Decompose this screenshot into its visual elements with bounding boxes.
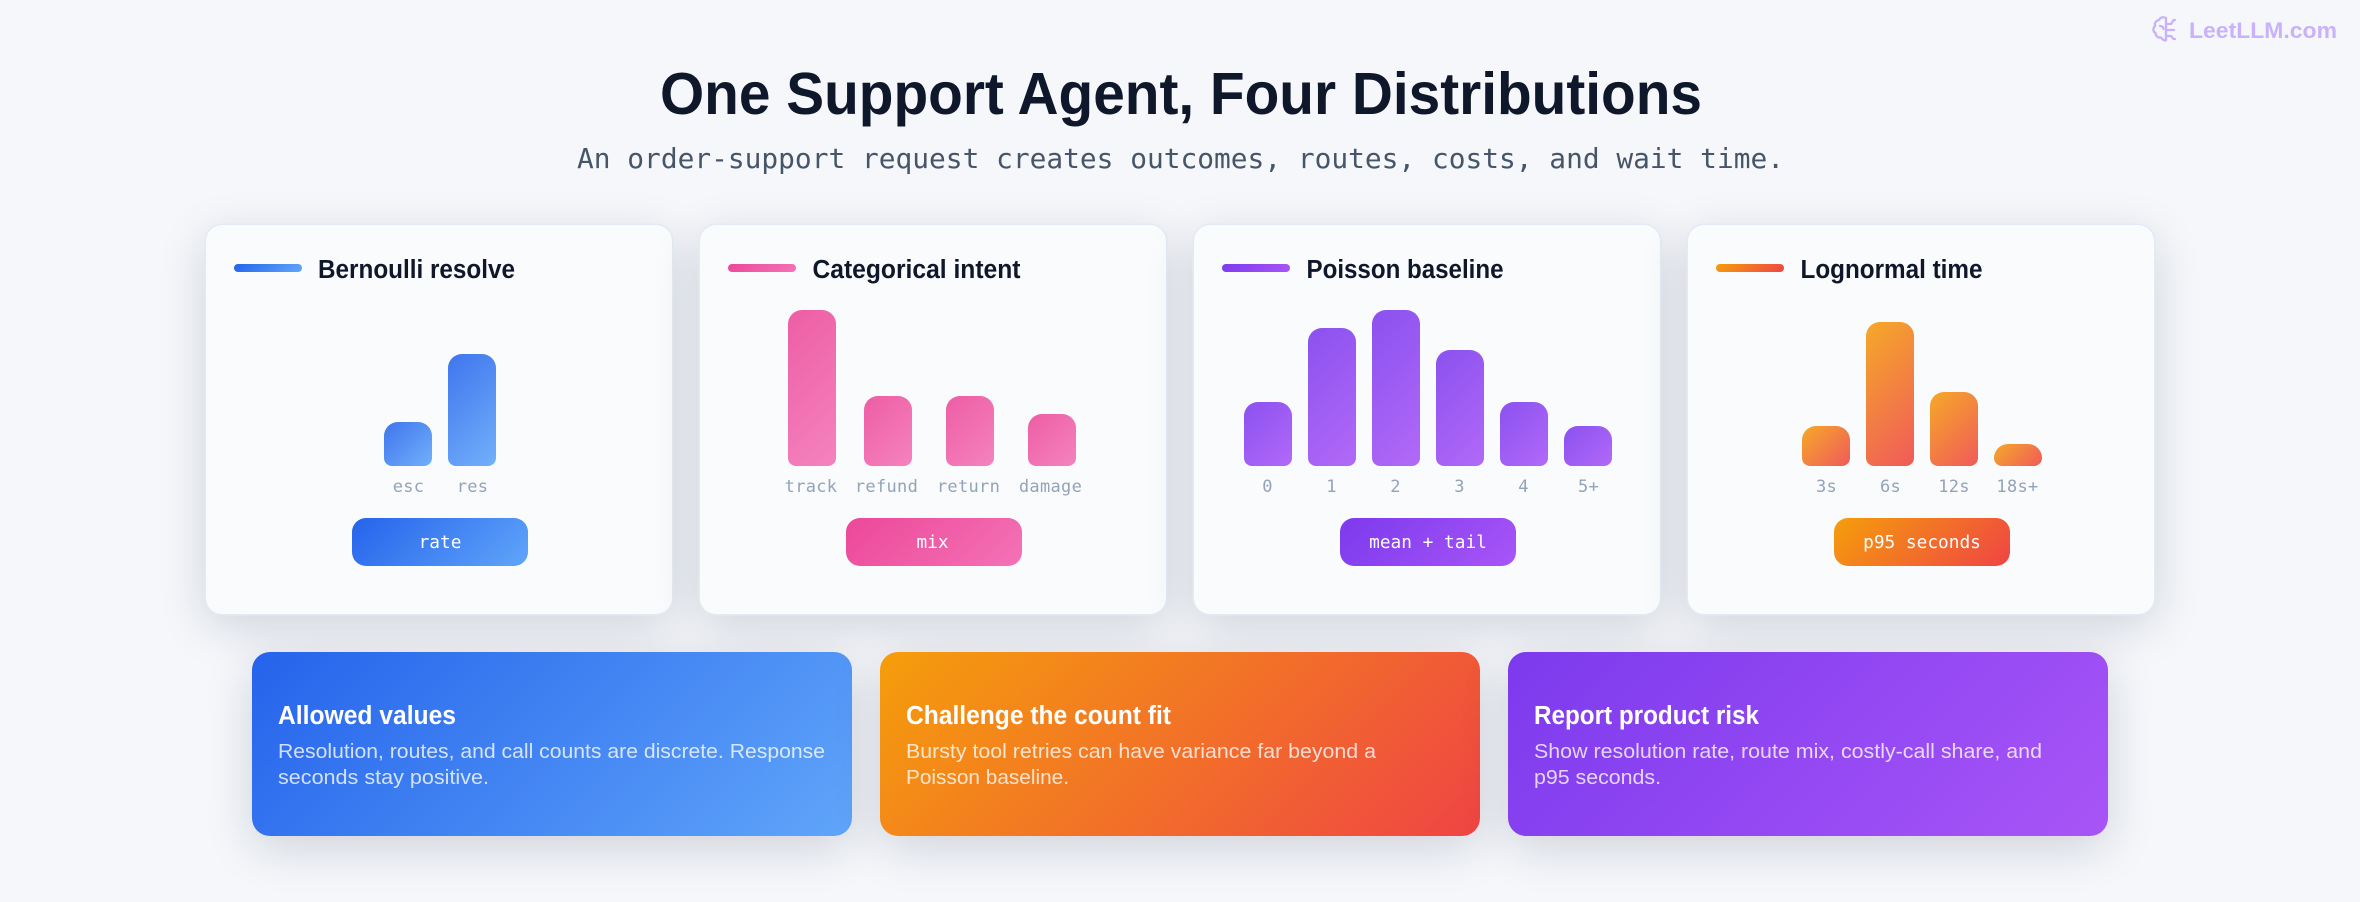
axis labels: 12s <box>1938 477 1970 497</box>
callout body: Resolution, routes, and call counts are discrete. Response <box>278 740 825 763</box>
metric pill: p95 seconds <box>1834 518 2010 566</box>
panel heading: Categorical intent <box>812 256 1021 284</box>
bar: esc <box>384 422 432 466</box>
bar: refund <box>864 396 912 466</box>
panel: Bernoulli resolve <box>206 225 672 614</box>
axis labels: damage <box>1019 477 1082 497</box>
callout heading: Allowed values <box>278 702 456 730</box>
bar: 0 <box>1244 402 1292 466</box>
callout body <box>906 740 1377 789</box>
title: One Support Agent, Four Distributions <box>660 61 1702 127</box>
axis labels: 4 <box>1518 477 1529 497</box>
panel: Lognormal time <box>1688 225 2154 614</box>
legend stripe <box>728 264 796 272</box>
metric pill: mix <box>846 518 1022 566</box>
bar chart <box>1244 310 1612 497</box>
callout body <box>1534 740 2042 789</box>
axis labels <box>1262 477 1599 497</box>
axis labels <box>785 477 1082 497</box>
bar: 5+ <box>1564 426 1612 466</box>
subtitle: An order-support request creates outcomes, routes, costs, and wait time. <box>577 142 1784 175</box>
callout: Challenge the count fit <box>880 652 1480 836</box>
bar: 6s <box>1866 322 1914 466</box>
panel: Categorical intent <box>700 225 1166 614</box>
axis labels: 5+ <box>1578 477 1599 497</box>
callout body: Bursty tool retries can have variance far beyond a <box>906 740 1377 763</box>
metric pill: mix: mix <box>916 532 949 553</box>
axis labels: 3 <box>1454 477 1465 497</box>
panel heading: Bernoulli resolve <box>318 256 515 284</box>
bar chart <box>785 310 1082 497</box>
bar: 18s+ <box>1994 444 2042 466</box>
brand text: LeetLLM.com <box>2189 18 2337 43</box>
callout: Report product risk <box>1508 652 2108 836</box>
callout body: Poisson baseline. <box>906 766 1069 789</box>
bar: 12s <box>1930 392 1978 466</box>
icon: brain <box>2153 17 2175 40</box>
axis labels: 1 <box>1326 477 1337 497</box>
axis labels <box>393 477 488 497</box>
callout body: seconds stay positive. <box>278 766 489 789</box>
callout heading: Report product risk <box>1534 702 1760 730</box>
callout body: Show resolution rate, route mix, costly-call share, and <box>1534 740 2042 763</box>
axis labels: return <box>937 477 1000 497</box>
axis labels: 3s <box>1816 477 1837 497</box>
axis labels: esc <box>393 477 424 497</box>
metric pill: mean + tail: mean + tail <box>1369 532 1487 553</box>
bar: track <box>788 310 836 466</box>
callout: Allowed values <box>252 652 852 836</box>
panel: Poisson baseline <box>1194 225 1660 614</box>
metric pill: rate <box>352 518 528 566</box>
bar: 4 <box>1500 402 1548 466</box>
axis labels: refund <box>855 477 918 497</box>
metric pill: mean + tail <box>1340 518 1516 566</box>
metric pill: rate: rate <box>419 532 461 553</box>
metric pill: p95 seconds: p95 seconds <box>1863 532 1981 553</box>
callout heading: Challenge the count fit <box>906 702 1171 730</box>
watermark: LeetLLM.com <box>2152 16 2337 43</box>
bar: 1 <box>1308 328 1356 466</box>
panel heading: Lognormal time <box>1800 256 1982 284</box>
axis labels: 0 <box>1262 477 1273 497</box>
legend stripe <box>1716 264 1784 272</box>
bar: res <box>448 354 496 466</box>
callout body: p95 seconds. <box>1534 766 1661 789</box>
axis labels: 6s <box>1880 477 1901 497</box>
axis labels: 2 <box>1390 477 1401 497</box>
axis labels: res <box>457 477 488 497</box>
bar chart <box>384 354 496 497</box>
callout body <box>278 740 825 789</box>
bar: 3 <box>1436 350 1484 466</box>
legend stripe <box>1222 264 1290 272</box>
axis labels: 18s+ <box>1996 477 2039 497</box>
bar chart <box>1802 322 2042 497</box>
bar: damage <box>1028 414 1076 466</box>
bar: 3s <box>1802 426 1850 466</box>
bar: 2 <box>1372 310 1420 466</box>
axis labels: track <box>785 477 837 497</box>
panel heading: Poisson baseline <box>1306 256 1504 284</box>
axis labels <box>1816 477 2039 497</box>
bar: return <box>946 396 994 466</box>
legend stripe <box>234 264 302 272</box>
